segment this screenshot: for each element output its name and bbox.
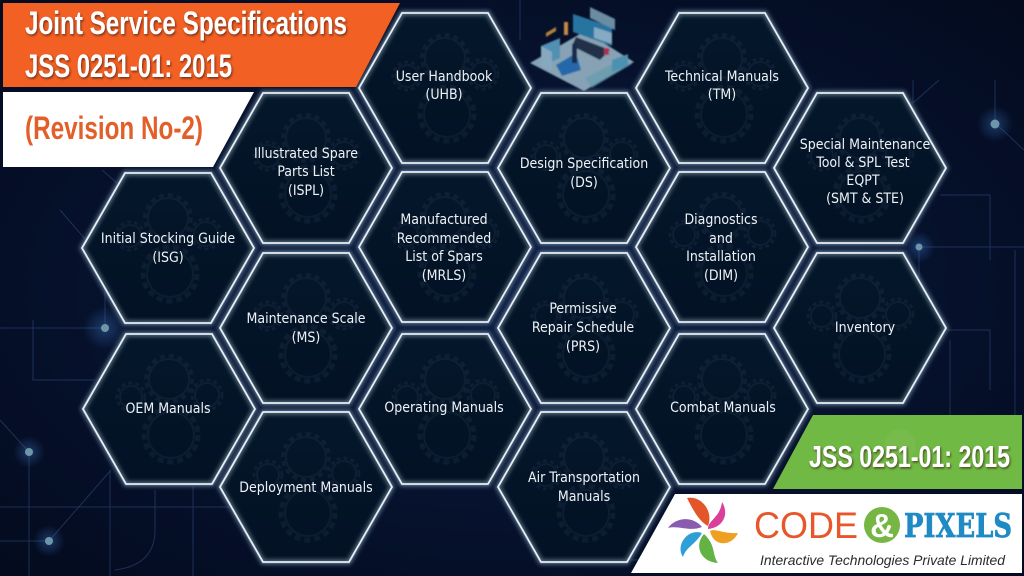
hexagon: Diagnostics and Installation: (DIM) xyxy=(704,268,738,284)
hexagon: Special Maintenance Tool and SPL Test EQPT: Special Maintenance xyxy=(800,137,931,153)
hexagon: Initial Stocking Guide: (ISG) xyxy=(152,250,184,266)
tagline: Interactive Technologies Private Limited xyxy=(760,552,1006,568)
logo panel: Code & Pixels xyxy=(631,494,1022,573)
hexagon: Illustrated Spare Parts List: Illustrated Spare xyxy=(254,146,358,162)
hexagon: Technical Manuals xyxy=(634,11,810,165)
hexagon: Diagnostics and Installation: Installation xyxy=(686,249,756,265)
hexagon: Design Specification: (DS) xyxy=(570,175,598,191)
hexagon: Initial Stocking Guide xyxy=(80,171,256,325)
icon: isometric workspace illustration xyxy=(530,7,634,91)
hexagon: Permissive Repair Schedule: Permissive xyxy=(549,301,617,317)
hexagon: OEM Manuals xyxy=(81,332,257,486)
hexagon: Diagnostics and Installation xyxy=(634,170,810,324)
hexagon: Design Specification xyxy=(496,91,672,245)
hexagon: Permissive Repair Schedule: Repair Schedule xyxy=(532,320,634,336)
hexagon: Maintenance Scale: (MS) xyxy=(292,330,320,346)
hexagon: Illustrated Spare Parts List xyxy=(218,91,394,245)
revision banner: (Revision No-2) xyxy=(25,110,203,146)
hexagon: Inventory: Inventory xyxy=(835,320,896,336)
hexagon: Initial Stocking Guide: Initial Stocking Guide xyxy=(101,231,235,247)
hexagon: Deployment Manuals xyxy=(218,410,394,564)
icon: ampersand badge xyxy=(864,507,900,544)
hexagon: Special Maintenance Tool and SPL Test EQPT: EQPT xyxy=(846,173,880,189)
hexagon: Diagnostics and Installation: Diagnostics xyxy=(684,212,758,228)
hexagon: Special Maintenance Tool and SPL Test EQPT: Tool & SPL Test xyxy=(815,155,910,171)
hexagon: User Handbook: User Handbook xyxy=(396,69,493,85)
title banner: Joint Service Specifications xyxy=(25,5,347,41)
hexagon: Combat Manuals xyxy=(634,332,810,486)
hexagon: Technical Manuals: Technical Manuals xyxy=(664,69,779,85)
hexagon: Manufactured Recommended List of Spars: (MRLS) xyxy=(422,268,466,284)
hexagon: Operating Manuals: Operating Manuals xyxy=(384,400,504,416)
hexagon: Special Maintenance Tool and SPL Test EQPT: (SMT & STE) xyxy=(826,191,904,207)
hexagon: Permissive Repair Schedule: (PRS) xyxy=(566,339,600,355)
wordmark: CODE: CODE xyxy=(754,505,858,546)
hexagon: Inventory xyxy=(772,251,948,405)
hexagon: Air Transportation Manuals: Air Transportation xyxy=(528,470,640,486)
title banner: JSS 0251-01: 2015 xyxy=(25,48,232,84)
hexagon: Illustrated Spare Parts List: (ISPL) xyxy=(288,183,324,199)
hexagon: Diagnostics and Installation: and xyxy=(709,231,733,247)
hexagon: Permissive Repair Schedule xyxy=(496,251,672,405)
hexagon: User Handbook xyxy=(357,11,533,165)
icon: ampersand badge: & xyxy=(870,507,894,544)
hexagon: Combat Manuals: Combat Manuals xyxy=(670,400,776,416)
title banner xyxy=(3,3,400,87)
hexagon: Operating Manuals xyxy=(357,332,533,486)
hexagon: Air Transportation Manuals: Manuals xyxy=(558,489,610,505)
hexagon: Air Transportation Manuals xyxy=(496,410,672,564)
hexagon: Manufactured Recommended List of Spars: List of Spars xyxy=(405,249,483,265)
hexagon: Manufactured Recommended List of Spars xyxy=(357,170,533,324)
hexagon: OEM Manuals: OEM Manuals xyxy=(125,401,211,417)
hexagon: Design Specification: Design Specification xyxy=(520,156,648,172)
hexagon: Manufactured Recommended List of Spars: Recommended xyxy=(397,231,491,247)
icon: pinwheel logo xyxy=(668,498,738,563)
revision banner xyxy=(3,92,254,167)
hexagon: Illustrated Spare Parts List: Parts List xyxy=(277,164,335,180)
green standard banner xyxy=(773,415,1022,489)
hexagon: Deployment Manuals: Deployment Manuals xyxy=(239,480,373,496)
hexagon: Maintenance Scale: Maintenance Scale xyxy=(246,311,366,327)
hexagon: Manufactured Recommended List of Spars: Manufactured xyxy=(400,212,488,228)
hexagon: Maintenance Scale xyxy=(218,251,394,405)
hexagon: User Handbook: (UHB) xyxy=(425,87,463,103)
hexagon: Technical Manuals: (TM) xyxy=(708,87,736,103)
hexagon: Special Maintenance Tool and SPL Test EQPT xyxy=(772,91,948,245)
